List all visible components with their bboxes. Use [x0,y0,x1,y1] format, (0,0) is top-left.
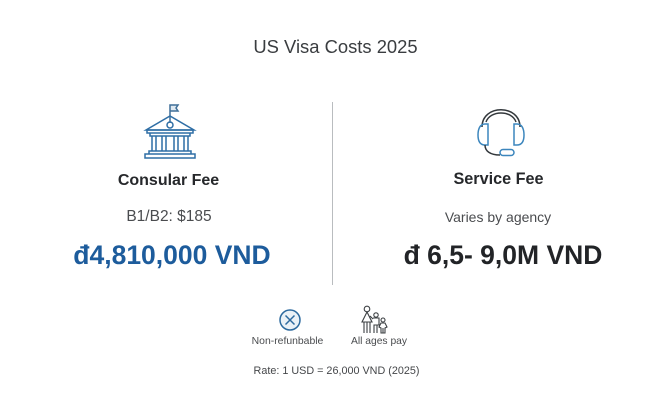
note: non-refundable [252,309,323,347]
panel: consular fee [73,104,271,270]
label: all ages pay: All ages pay [351,336,407,347]
amount: consular fee in VND: đ4,810,000 VND [73,240,271,270]
divider [332,102,333,285]
amount: service fee in VND: đ 6,5- 9,0M VND [404,240,602,270]
text: varies by agency: Varies by agency [445,209,551,225]
icon: x circle [279,309,301,331]
title: US Visa Costs 2025 [253,36,418,57]
note: all ages pay [351,306,407,347]
heading: service fee: Service Fee [454,170,544,188]
icon: government building [143,104,197,159]
text: B1/B2 price: B1/B2: $185 [126,208,212,225]
heading: consular fee: Consular Fee [118,172,219,189]
icon: headset [477,109,525,156]
icon: family [361,306,388,334]
label: non-refunbable: Non-refunbable [252,336,323,347]
footnote: exchange rate: Rate: 1 USD = 26,000 VND (2025) [254,365,419,377]
panel: service fee [404,109,602,270]
